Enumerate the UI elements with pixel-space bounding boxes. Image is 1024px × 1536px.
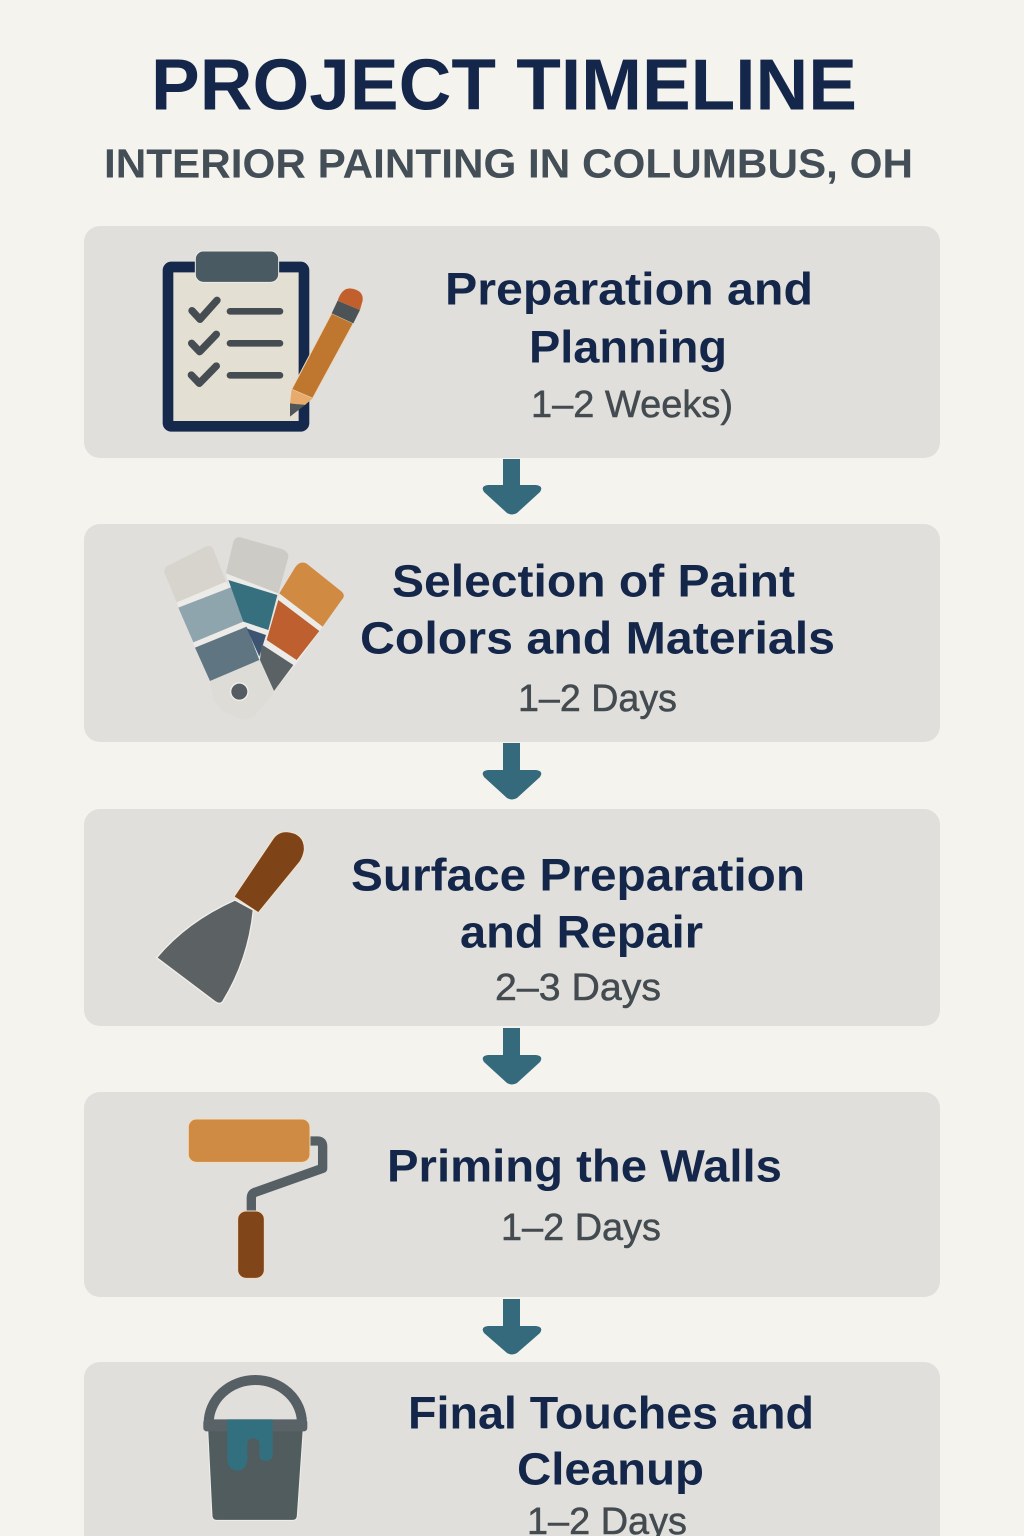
duration: 1–2 Days xyxy=(501,1207,661,1249)
icon: clipboard and pencil xyxy=(168,251,363,426)
heading line 2: Planning xyxy=(529,322,727,372)
heading: Final Touches and xyxy=(408,1388,814,1438)
panel: priming the walls xyxy=(84,1092,940,1297)
card background xyxy=(84,524,940,742)
subtitle: INTERIOR PAINTING IN COLUMBUS, OH xyxy=(104,140,913,186)
icon: putty knife xyxy=(157,832,304,1003)
arrow xyxy=(483,459,541,514)
panel: selection of paint colors and materials xyxy=(84,524,940,742)
heading: Preparation and xyxy=(445,264,813,314)
heading: Selection of Paint xyxy=(392,556,795,606)
heading: Priming the Walls xyxy=(387,1140,782,1192)
arrow xyxy=(483,1028,541,1084)
heading line 2: and Repair xyxy=(460,906,703,958)
duration: 1–2 Days xyxy=(518,678,677,720)
icon: paint bucket xyxy=(203,1380,307,1520)
arrow xyxy=(483,1299,541,1354)
duration: 2–3 Days xyxy=(495,967,661,1009)
panel: preparation and planning xyxy=(84,226,940,458)
heading line 2: Colors and Materials xyxy=(360,612,835,664)
card background xyxy=(84,809,940,1026)
panel: surface preparation and repair xyxy=(84,809,940,1026)
card background xyxy=(84,1362,940,1536)
heading line 2: Cleanup xyxy=(517,1444,704,1494)
arrow xyxy=(483,743,541,800)
duration: 1–2 Weeks) xyxy=(531,384,733,426)
heading: Surface Preparation xyxy=(351,850,805,900)
card background xyxy=(84,1092,940,1297)
panel: final touches and cleanup xyxy=(84,1362,940,1536)
card background xyxy=(84,226,940,458)
title: PROJECT TIMELINE xyxy=(151,46,857,126)
icon: paint roller xyxy=(188,1119,323,1278)
icon: paint swatches xyxy=(164,537,344,719)
